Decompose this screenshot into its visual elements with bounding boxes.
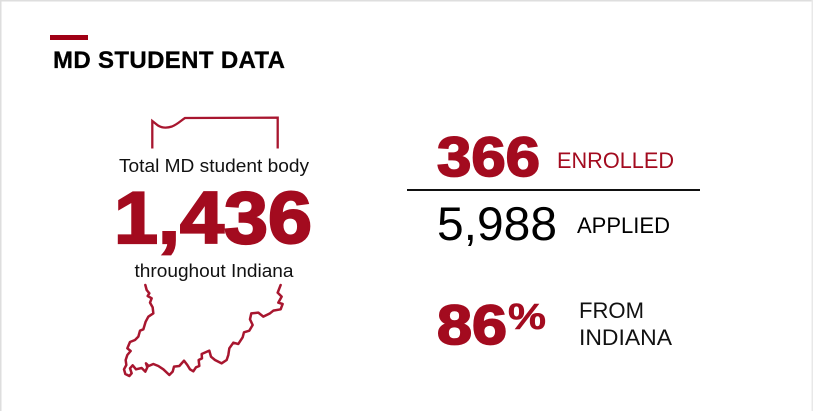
label: enrolled: ENROLLED xyxy=(557,148,674,173)
stat: from Indiana percent: % xyxy=(508,296,546,337)
title: MD STUDENT DATA xyxy=(53,47,285,74)
icon: Indiana outline top xyxy=(152,118,278,148)
stat: from Indiana percent: 86 xyxy=(437,293,507,356)
stat: total students: 1,436 xyxy=(114,178,312,259)
divider xyxy=(407,189,700,191)
icon: Indiana outline bottom xyxy=(124,285,283,376)
label: from Indiana: INDIANA xyxy=(579,325,672,350)
stat: applied number: 5,988 xyxy=(437,197,557,250)
label: from Indiana: FROM xyxy=(579,298,644,323)
label: applied: APPLIED xyxy=(577,213,670,238)
text: throughout Indiana: throughout Indiana xyxy=(134,260,294,281)
heading accent bar xyxy=(50,35,88,40)
label: from Indiana xyxy=(579,298,672,350)
text: total student body label: Total MD student body xyxy=(119,155,310,176)
stat: enrolled number: 366 xyxy=(437,125,540,188)
stat: from Indiana percent xyxy=(437,293,546,356)
